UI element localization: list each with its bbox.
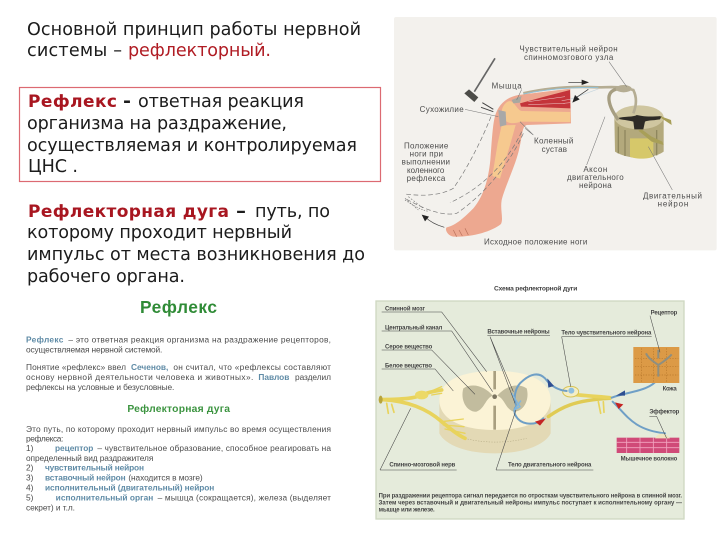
text block: reflex arc list: 4) [26,482,34,492]
arrow: foot movement [422,215,444,227]
labels: knee diagram: двигательного [567,173,624,182]
arrows: impulse direction [568,80,589,103]
labels: arc diagram: Мышечное волокно [621,456,678,462]
labels: knee diagram: ноги при [410,150,443,159]
tendon [498,110,506,127]
ganglion: sensory neuron body [563,386,579,397]
panel: reflex arc definition: которому проходит нервный [27,223,292,243]
panel: main principle text: Основной принцип работы нервной [27,20,361,40]
labels: arc diagram: Серое вещество [385,344,433,350]
text block: Sechenov and Pavlov: он считал, что «рефлексы составляют [173,362,331,372]
caption [379,492,682,514]
text block: reflex arc list: чувствительный нейрон [45,462,144,472]
labels: arc diagram: Центральный канал [385,324,443,331]
labels: knee diagram: Двигательный [643,192,702,201]
text block: reflex arc list: 5) [26,492,34,502]
labels: knee diagram: сустав [542,145,567,154]
text block: Sechenov and Pavlov: рефлексы на условные и безусловные. [26,382,174,392]
labels: arc diagram: Вставочные нейроны [487,329,550,336]
caption: мышце или железе. [379,508,435,514]
labels: arc diagram: Спинной мозг [385,305,425,312]
panel: reflex definition box: осуществляемая и контролируемая [27,136,357,156]
text block: reflex arc list: рефлекса: [26,434,63,444]
text block: reflex arc list: 2) [26,462,34,472]
panel: main principle text [27,20,361,61]
labels: knee diagram: нейрон [658,199,688,208]
labels: arc diagram: Тело двигательного нейрона [508,462,592,469]
text block: reflex arc list: 3) [26,472,34,482]
leader lines [380,312,667,470]
skin with receptor [633,347,679,383]
text block: Sechenov and Pavlov: разделил [295,372,331,382]
panel: reflex arc diagram [376,285,684,519]
labels: knee diagram: рефлекса [407,174,446,183]
labels: arc diagram [385,305,680,469]
text block: Sechenov and Pavlov [26,362,331,392]
labels: knee diagram [402,45,702,247]
text block: reflex arc list [26,424,331,512]
caption: При раздражении рецептора сигнал передается по отросткам чувствительного нейрона в спинной мозг. [379,492,682,499]
labels: knee diagram: Мышца [492,81,522,90]
labels: knee diagram: Положение [404,142,449,151]
leader lines [465,62,672,190]
panel: reflex definition box [20,88,380,182]
panel: reflex arc definition: – [236,202,246,222]
text block: reflex arc list: – чувствительное образование, способное реагировать на [97,443,331,453]
labels: arc diagram: Спинно-мозговой нерв [389,462,456,469]
text block: Sechenov and Pavlov: Сеченов, [131,362,168,372]
panel: reflex arc definition: импульс от места возникновения до [27,245,365,265]
text block: reflex arc list: (находится в мозге) [128,472,203,482]
labels: knee diagram: Сухожилие [420,105,464,114]
text block: reflex arc list: Это путь, по которому проходит нервный импульс во время осуществления [26,424,331,434]
dashed reflex leg position [405,117,523,214]
panel: reflex definition box: ЦНС . [28,157,78,177]
labels: knee diagram: Аксон [583,165,607,174]
labels: knee diagram: коленного [407,166,445,175]
text block: reflex arc list: секрет) и т.л. [26,502,75,512]
spinal cord segment [614,105,672,159]
text block: reflex arc list: – мышца (сокращается), железа (выделяет [158,492,331,502]
text block: Sechenov and Pavlov: основу нервной деятельности человека и животных». [26,372,253,382]
labels: knee diagram: выполнении [402,158,450,167]
panel: main principle text: системы – [27,41,122,61]
panel: reflex definition box: ответная реакция [138,92,304,112]
heading: reflex arc: Рефлекторная дуга [127,403,230,415]
arrows: impulse direction markers [535,378,625,426]
spinal cord cross-section [439,371,551,453]
panel: reflex arc definition: рабочего органа. [27,267,185,287]
panel: reflex definition box: - [123,92,131,112]
text block: reflex definition: – это ответная реакция организма на раздражение рецепторов, [68,334,331,344]
labels: knee diagram: нейрона [579,181,612,190]
arrows: tap on tendon [481,103,493,112]
panel: reflex definition box: организма на раздражение, [27,114,287,134]
text block: reflex arc list: вставочный нейрон [45,472,126,482]
muscle [520,90,570,108]
bone: femur and tibia [502,101,570,123]
muscle fibre [617,434,679,453]
text block: reflex definition [26,334,331,354]
text block: reflex definition: осуществляемая нервной системой. [26,344,162,354]
labels: arc diagram: Кожа [663,387,677,393]
toes [453,228,468,237]
labels: arc diagram: Тело чувствительного нейрона [561,329,652,336]
panel: reflex definition box: Рефлекс [28,92,117,112]
neuron pathways [512,365,665,433]
labels: arc diagram: Рецептор [651,310,678,316]
text block: Sechenov and Pavlov: Павлов [258,372,289,382]
panel: main principle text: рефлекторный. [128,41,271,61]
text block: reflex arc list: определенный вид раздражителя [26,453,153,463]
panel: knee reflex illustration [394,17,717,250]
text block: Sechenov and Pavlov: Понятие «рефлекс» ввел [26,362,126,372]
panel: reflex arc definition: Рефлекторная дуга [28,202,229,222]
spinal nerve [381,387,610,438]
leg [446,89,571,237]
panel: reflex arc definition [27,202,365,287]
text block: reflex arc list: исполнительный орган [56,492,153,502]
text block: reflex arc list: рецептор [55,443,93,453]
diagram title: Схема рефлекторной дуги [494,285,577,293]
panel: reflex notes excerpt [26,297,331,512]
text block: reflex definition: Рефлекс [26,334,64,344]
labels: knee diagram: спинномозгового узла [524,53,614,62]
text block: reflex arc list: 1) [26,443,34,453]
nerve fibres [523,85,636,120]
heading: reflex: Рефлекс [140,297,217,317]
labels: arc diagram: Эффектор [649,409,680,416]
text block: reflex arc list: исполнительный (двигательный) нейрон [45,482,214,492]
panel: reflex arc definition: путь, по [255,202,330,222]
labels: knee diagram: Коленный [534,136,573,145]
icon: reflex hammer [464,58,495,102]
labels: arc diagram: Белое вещество [385,363,432,369]
labels: knee diagram: Чувствительный нейрон [519,45,618,54]
labels: knee diagram: Исходное положение ноги [484,238,587,247]
caption: Затем через вставочный и двигательный нейроны импульс поступает к исполнительному органу — [379,500,682,507]
